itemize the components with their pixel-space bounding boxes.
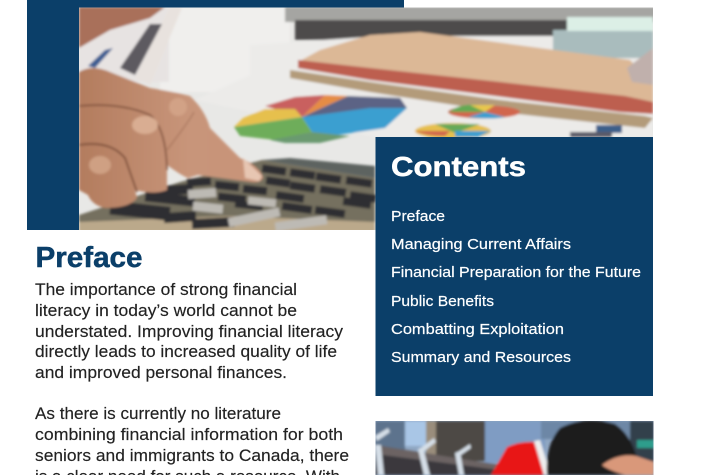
small pie charts: [415, 105, 622, 139]
hand pressing key: [79, 68, 263, 208]
lamp posts: [375, 428, 471, 475]
flag: [491, 442, 546, 475]
preface heading: Preface: [36, 242, 142, 274]
contents list: Public Benefits: [391, 293, 494, 310]
contents list: Combatting Exploitation: [391, 321, 564, 338]
preface body text: understated. Improving financial literacy: [35, 322, 344, 341]
hair: [547, 420, 640, 475]
notebook: [290, 32, 653, 128]
fingers: [602, 455, 654, 475]
photo backdrop: [160, 7, 655, 137]
preface body text: directly leads to increased quality of life: [35, 342, 337, 361]
preface body text: The importance of strong financial: [35, 280, 297, 299]
calculator: [79, 158, 376, 232]
preface body text: literacy in today’s world cannot be: [35, 301, 297, 320]
contents list: Managing Current Affairs: [391, 236, 571, 253]
preface body text: and improved personal finances.: [35, 363, 287, 382]
large pie chart: [234, 95, 407, 143]
preface body text: [35, 280, 349, 475]
contents list: Summary and Resources: [391, 349, 571, 366]
contents list: Preface: [391, 208, 445, 225]
contents panel: [376, 137, 653, 396]
contents heading: Contents: [391, 151, 526, 182]
background blue block: [27, 0, 404, 230]
contents list: Financial Preparation for the Future: [391, 264, 641, 281]
preface body text: As there is currently no literature: [35, 404, 281, 423]
photo: person with Canadian flag: [375, 420, 654, 475]
contents list: [391, 208, 641, 366]
preface body text: combining financial information for both: [35, 425, 343, 444]
top-left hand and papers: [79, 7, 182, 85]
photo: hand on calculator with charts: [79, 7, 655, 232]
preface body text: seniors and immigrants to Canada, there: [35, 446, 349, 465]
